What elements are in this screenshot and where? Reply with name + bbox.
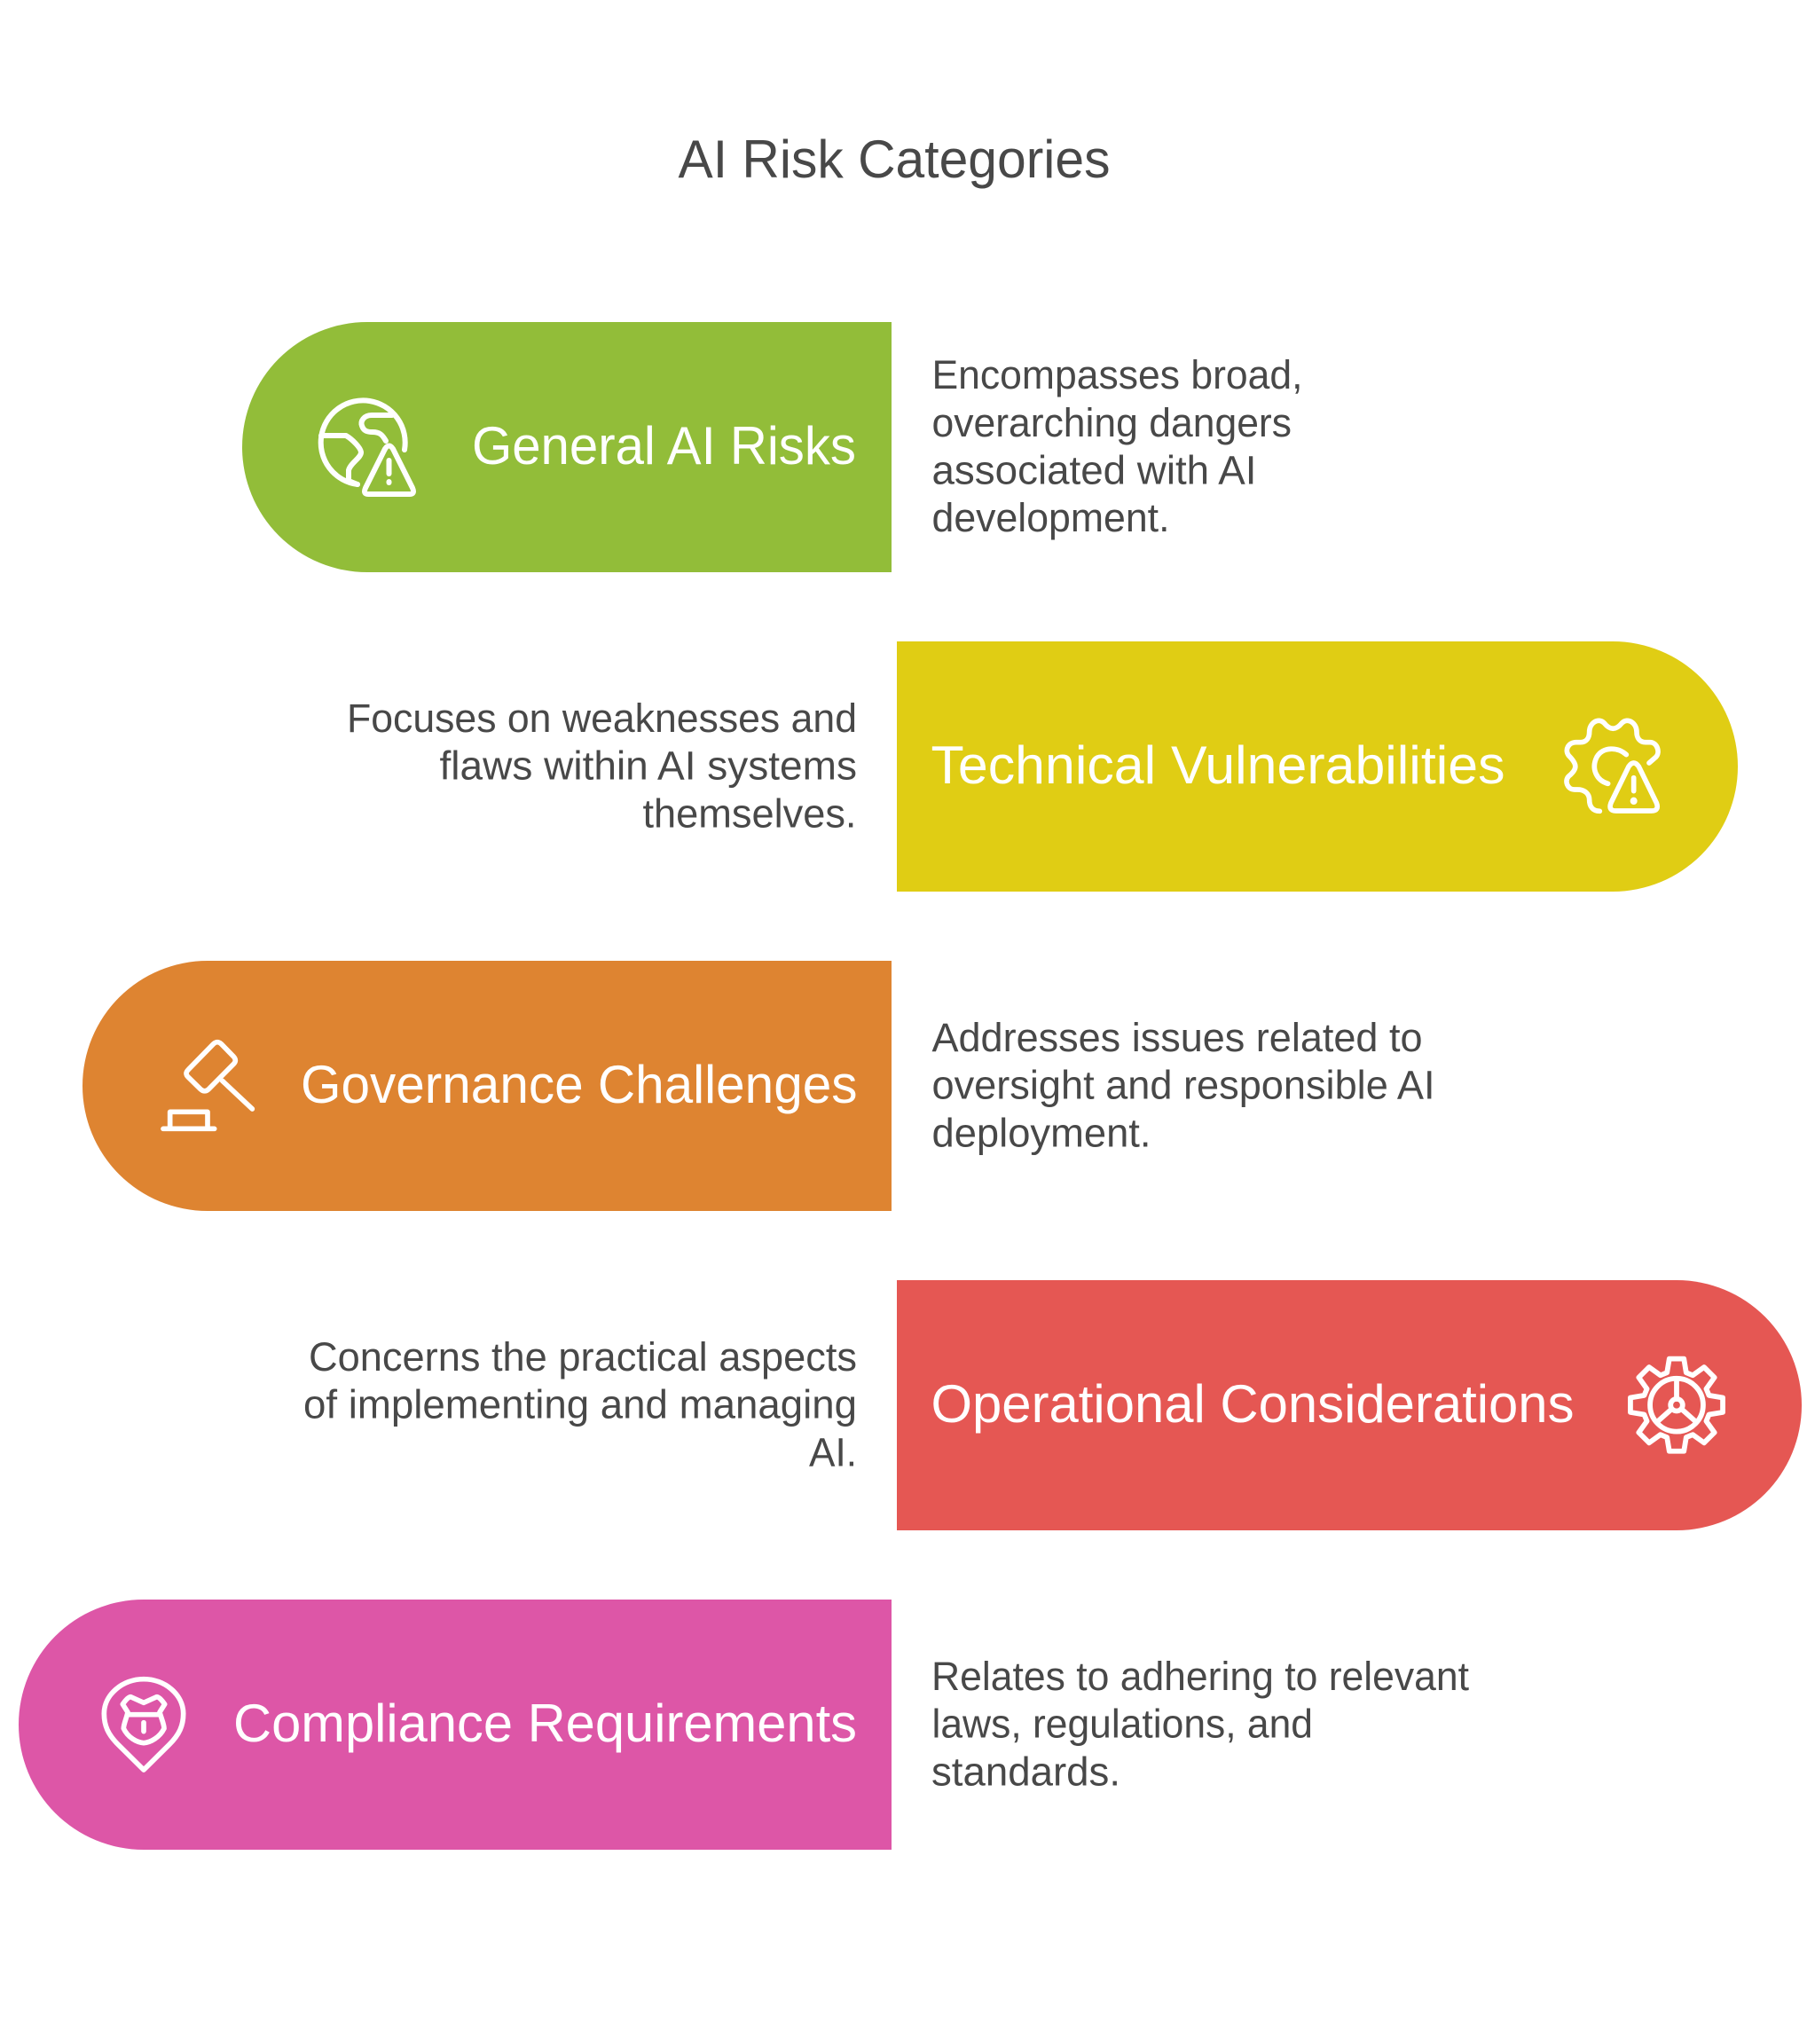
description: Compliance Requirements: Relates to adhering to relevant: [931, 1654, 1469, 1699]
icon: gavel: [163, 1042, 252, 1128]
panel: Technical Vulnerabilities: [897, 641, 1738, 892]
description: Operational Considerations: Concerns the practical aspects: [309, 1334, 857, 1380]
description: General AI Risks: Encompasses broad,: [931, 352, 1302, 397]
description: Governance Challenges: Addresses issues related to: [931, 1015, 1423, 1060]
panel: Operational Considerations: [897, 1280, 1802, 1530]
description: General AI Risks: overarching dangers: [931, 400, 1292, 445]
icon: location pin with shield: [104, 1679, 184, 1770]
icon: gear with wheel: [1630, 1359, 1723, 1451]
description: Governance Challenges: deployment.: [931, 1111, 1151, 1156]
description: Governance Challenges: [931, 1015, 1435, 1156]
description: Technical Vulnerabilities: Focuses on weaknesses and: [347, 696, 857, 741]
description: General AI Risks: development.: [931, 495, 1169, 540]
title: AI Risk Categories: [678, 130, 1111, 189]
description: Technical Vulnerabilities: themselves.: [642, 791, 857, 837]
description: Technical Vulnerabilities: flaws within AI systems: [440, 743, 857, 789]
description: Compliance Requirements: [931, 1654, 1469, 1795]
icon: globe with warning triangle: [321, 400, 413, 494]
description: Governance Challenges: oversight and responsible AI: [931, 1063, 1435, 1108]
description: Technical Vulnerabilities: [347, 696, 857, 837]
panel: General AI Risks: [242, 322, 892, 572]
panel: Compliance Requirements: [19, 1600, 892, 1850]
description: General AI Risks: associated with AI: [931, 448, 1256, 493]
description: Compliance Requirements: standards.: [931, 1749, 1120, 1795]
icon: gear with warning triangle: [1567, 720, 1658, 811]
description: Operational Considerations: of implementing and managing: [303, 1382, 857, 1427]
description: Operational Considerations: [303, 1334, 857, 1475]
heading: Compliance Requirements: [233, 1694, 857, 1753]
heading: Governance Challenges: [301, 1055, 857, 1114]
panel: Governance Challenges: [82, 961, 892, 1211]
description: General AI Risks: [931, 352, 1302, 540]
heading: Technical Vulnerabilities: [931, 735, 1505, 795]
description: Compliance Requirements: laws, regulations, and: [931, 1702, 1313, 1747]
heading: General AI Risks: [472, 416, 856, 476]
description: Operational Considerations: AI.: [809, 1430, 857, 1475]
heading: Operational Considerations: [931, 1374, 1574, 1434]
